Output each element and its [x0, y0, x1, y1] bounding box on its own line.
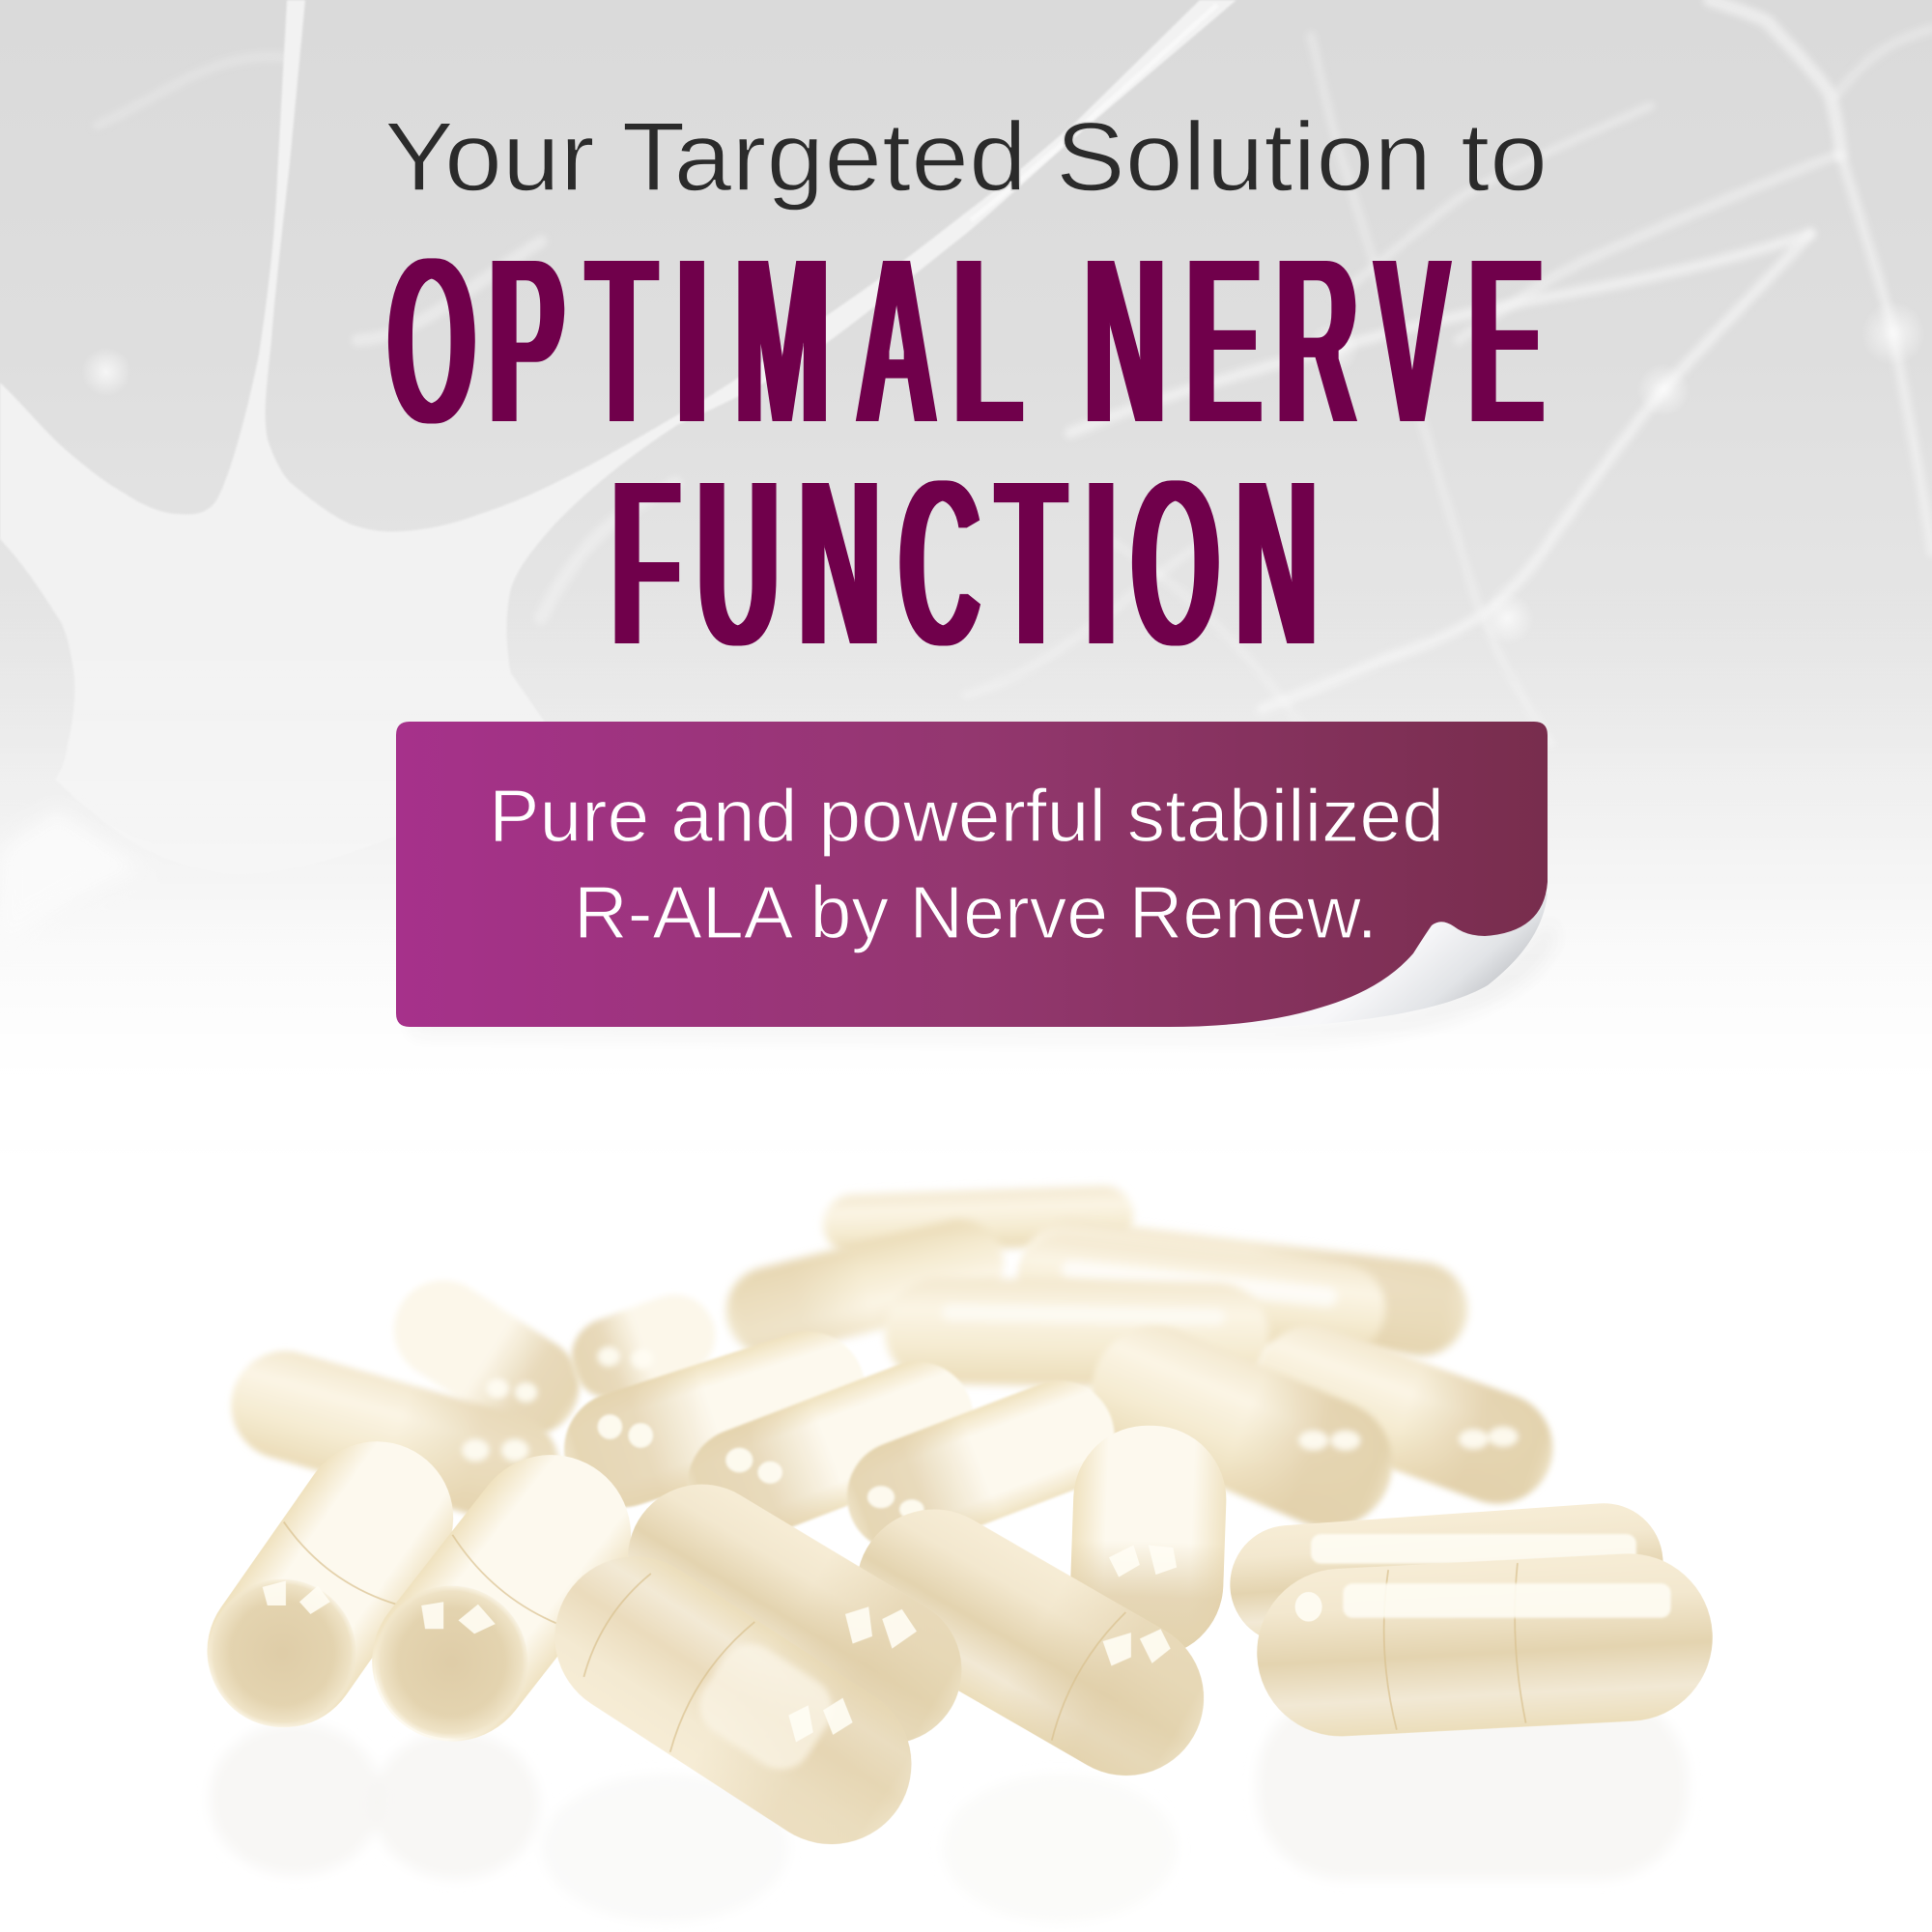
capsule: front left: [340, 1423, 664, 1774]
banner shadow: [411, 918, 1553, 1039]
lower left dendrite: [0, 810, 145, 947]
capsule: right front horizontal: [1253, 1549, 1717, 1741]
heading: subtitle: Your Targeted Solution to: [384, 103, 1548, 212]
capsule: front far left: [177, 1411, 483, 1757]
banner text line 2: R-ALA by Nerve Renew.: [574, 871, 1378, 954]
capsule: back far left: [375, 1262, 598, 1454]
capsule reflections: [210, 1694, 1688, 1922]
capsule pile: [177, 1184, 1717, 1922]
capsule: back centre: [884, 1277, 1270, 1389]
banner text line 1: Pure and powerful stabilized: [489, 775, 1444, 858]
background: grey gradient: [0, 0, 1932, 1159]
capsule: front centre rear: [600, 1457, 989, 1772]
capsule: front centre right: [828, 1481, 1233, 1804]
capsule: right front of behind: [1072, 1306, 1412, 1548]
glowing nodes: [81, 300, 1926, 645]
capsule: centre right: [831, 1365, 1130, 1568]
bright axon highlight: [971, 5, 1217, 220]
capsule: front centre: [525, 1526, 942, 1875]
fade to white: [0, 599, 1932, 1140]
capsule: small back: [560, 1283, 726, 1410]
heading: function: FUNCTION: [611, 426, 1318, 699]
capsule: upright: [1068, 1423, 1229, 1660]
capsule: right rear horizontal: [1226, 1499, 1667, 1648]
capsule: left upper: [218, 1338, 573, 1535]
capsule: back top: [822, 1184, 1134, 1255]
capsule: right behind: [1241, 1310, 1569, 1520]
background: neuron network: [0, 0, 1932, 1140]
capsule: back middle right: [1013, 1231, 1390, 1357]
thin right dendrites: [97, 0, 1932, 744]
banner body: [396, 722, 1548, 1027]
capsule: centre left: [549, 1317, 880, 1522]
panel: peeling banner: [396, 722, 1553, 1039]
capsule: back left of centre: [717, 1210, 1013, 1365]
heading: optimal nerve: OPTIMAL NERVE: [387, 204, 1544, 477]
capsule: centre: [671, 1345, 990, 1558]
page curl: [1219, 894, 1548, 1027]
capsule: back long right: [1018, 1214, 1473, 1361]
neuron cell body: [0, 0, 1236, 875]
